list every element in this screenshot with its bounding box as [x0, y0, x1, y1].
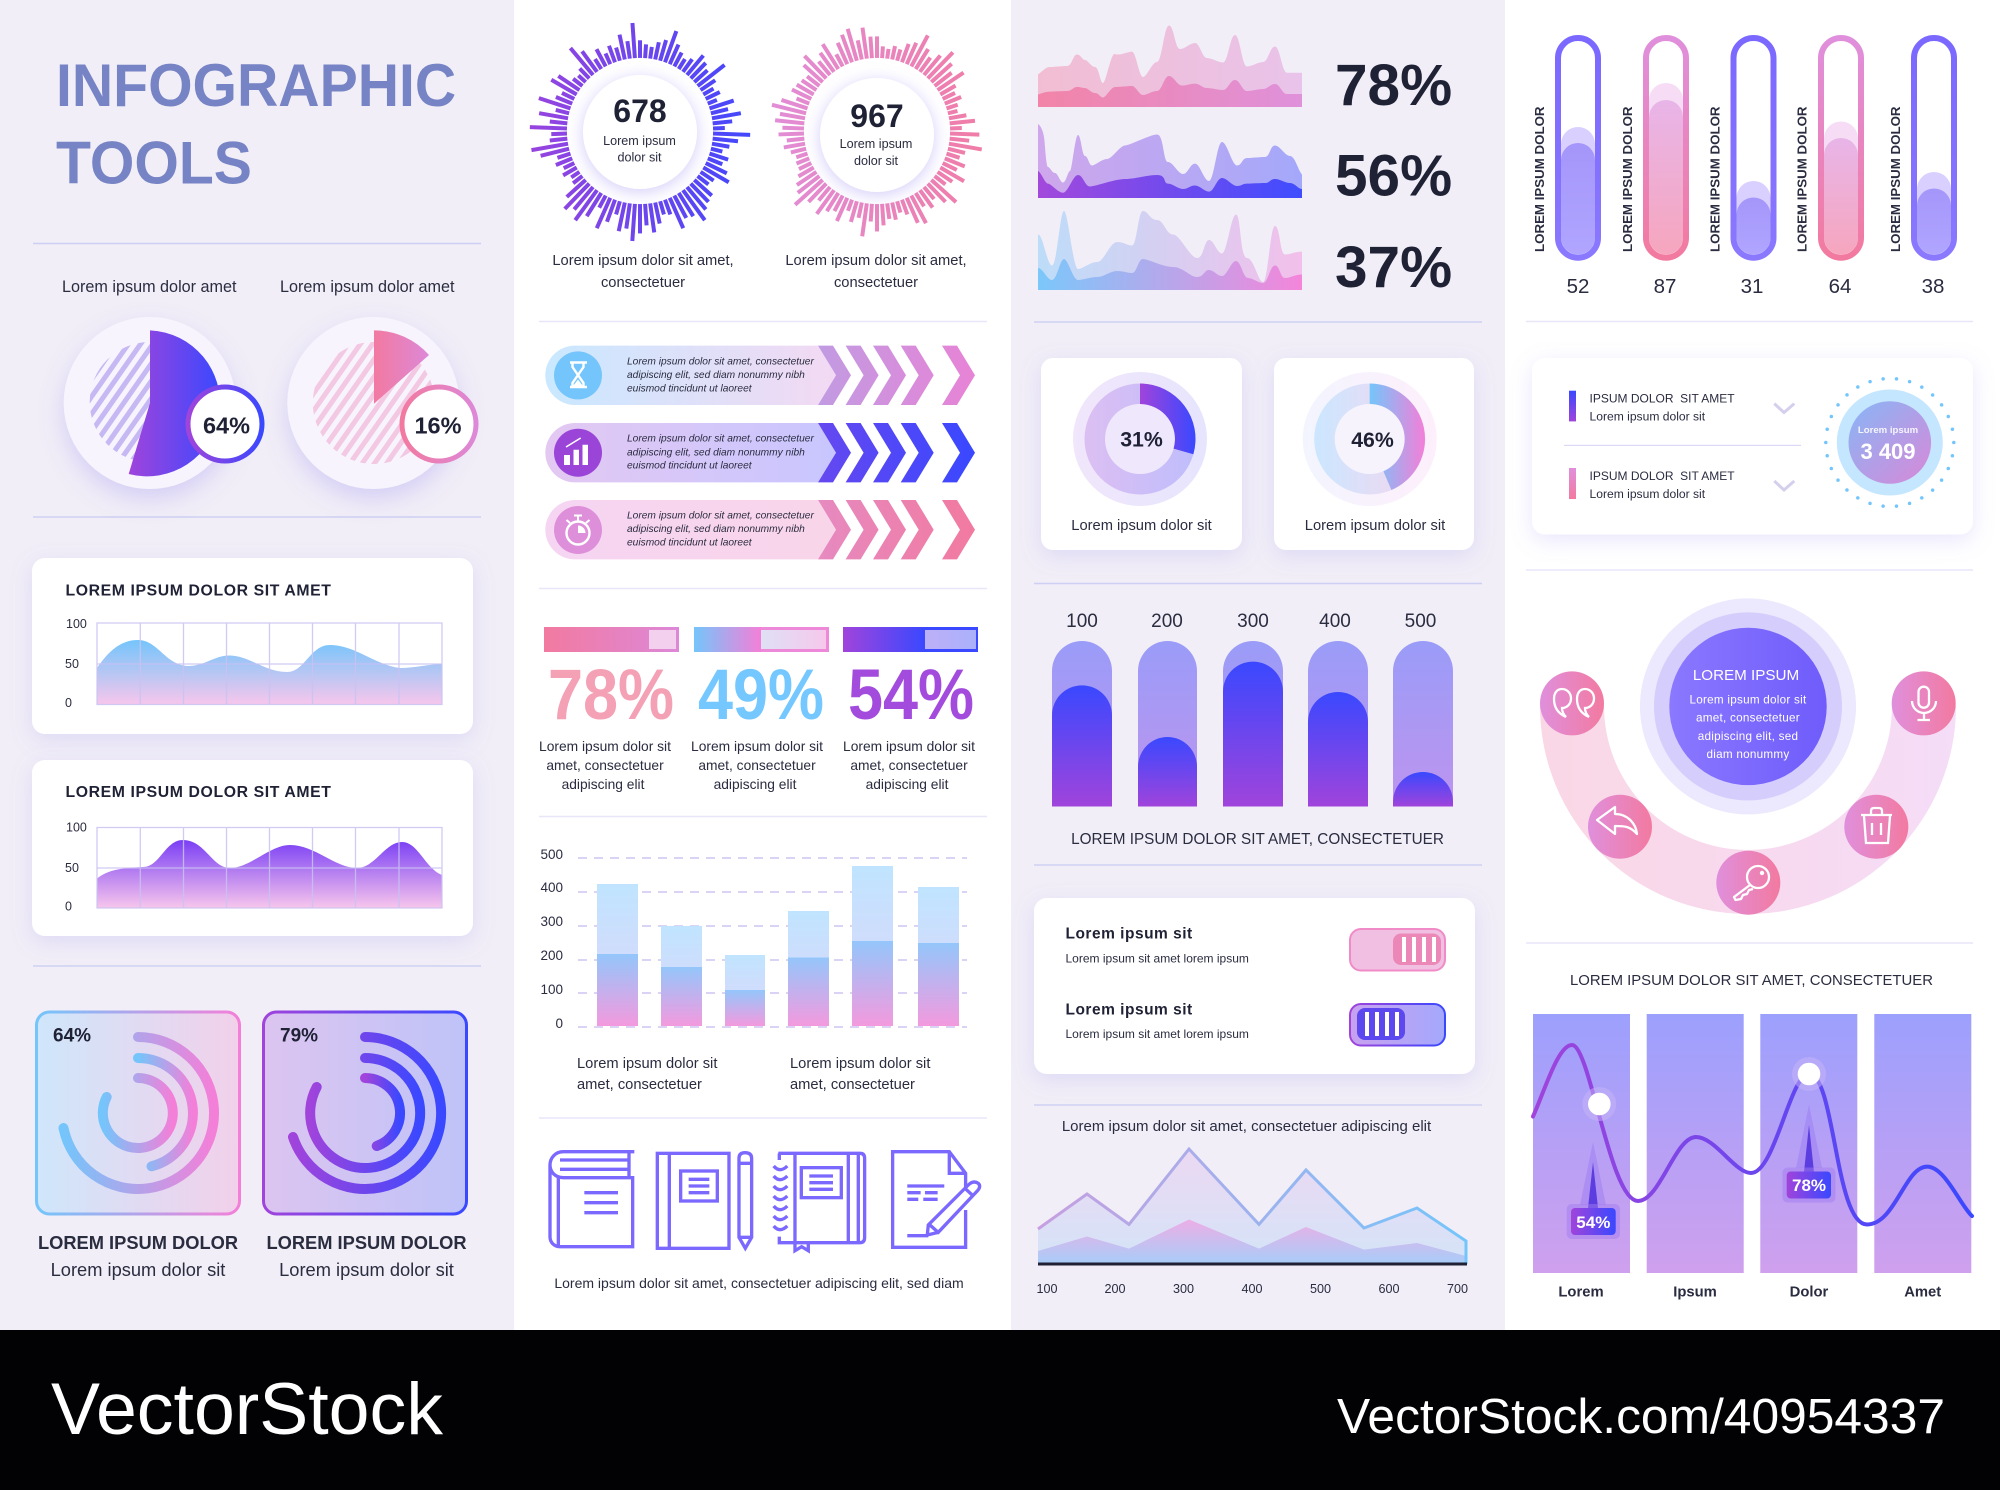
stat: 49%: amet, consectetuer — [698, 758, 816, 773]
capsule bar chart: LOREM IPSUM DOLOR SIT AMET, CONSECTETUER — [1071, 831, 1444, 848]
polygon area chart: 600 — [1378, 1282, 1400, 1296]
polygon area chart: 500 — [1310, 1282, 1331, 1296]
icon: reply — [1588, 795, 1652, 859]
capsule bar chart: 500 — [1405, 611, 1436, 632]
panel: line chart card 2 — [32, 760, 473, 936]
callout 78%: 78% — [1792, 1176, 1826, 1195]
gauge 87: 87 — [1654, 275, 1676, 298]
area chart 78% — [1038, 26, 1452, 118]
radial bar gauge 967: Lorem ipsum — [840, 137, 912, 151]
toggle: violet — [1350, 1004, 1445, 1046]
radial bar gauge 678: Lorem ipsum — [603, 134, 676, 148]
icon: hourglass — [554, 351, 602, 399]
card: toggles — [1034, 898, 1475, 1074]
column chart with curve: LOREM IPSUM DOLOR SIT AMET, CONSECTETUER — [1570, 973, 1933, 989]
gauge 52 — [1532, 38, 1598, 298]
panel: radial arc card 64%: Lorem ipsum dolor sit — [51, 1259, 225, 1280]
center circle: Lorem ipsum dolor sit — [1690, 693, 1807, 706]
polygon area chart — [1036, 1118, 1468, 1296]
arrow row 3: stopwatch: adipiscing elit, sed diam nonummy nibh — [627, 524, 805, 535]
stat: 54%: 54% — [848, 655, 974, 735]
arc band — [1540, 706, 1956, 914]
counter circle — [1826, 378, 1954, 506]
trend curve — [1533, 1045, 1972, 1224]
stat: 78%: adipiscing elit — [562, 777, 645, 792]
icon: trash — [1844, 795, 1908, 859]
stacked bar chart: 500 — [540, 847, 563, 862]
stacked bar chart — [540, 847, 967, 1093]
stat: 54%: amet, consectetuer — [850, 758, 968, 773]
radial bar gauge 967: consectetuer — [834, 275, 918, 291]
card: donut 46%: 46% — [1351, 428, 1394, 452]
gauge 38: LOREM IPSUM DOLOR — [1888, 106, 1903, 252]
icon row: books and notes — [550, 1152, 980, 1291]
gauge 38 — [1888, 38, 1954, 298]
stat: 54%: adipiscing elit — [866, 777, 949, 792]
panel: radial arc card 79%: 79% — [280, 1026, 318, 1046]
arrow row 1: hourglass: Lorem ipsum dolor sit amet, consectetuer — [627, 357, 814, 368]
capsule bar chart — [1052, 611, 1453, 848]
arrow row 1: hourglass — [545, 346, 975, 405]
stacked bar chart: 300 — [540, 914, 563, 929]
gauge 52: LOREM IPSUM DOLOR — [1532, 106, 1547, 252]
toggle: pink — [1350, 929, 1445, 970]
panel: pie charts — [62, 278, 476, 489]
arrow row 3: stopwatch — [545, 500, 975, 559]
radial bar gauge 678: 678 — [613, 93, 667, 129]
panel: line chart card 1: 0 — [65, 696, 72, 710]
arrow row 2: bar chart — [545, 423, 975, 482]
icon: quote — [1540, 671, 1604, 735]
radial menu — [1540, 598, 1956, 915]
card: list and counter: IPSUM DOLOR SIT AMET — [1590, 392, 1735, 406]
footer bar: VectorStock — [51, 1369, 443, 1450]
capsule bar chart: 100 — [1066, 611, 1098, 632]
card: toggles: Lorem ipsum sit amet lorem ipsum — [1066, 952, 1249, 966]
card: toggles: Lorem ipsum sit amet lorem ipsum — [1066, 1027, 1249, 1041]
icon: spiral notebook — [774, 1153, 865, 1251]
center circle: adipiscing elit, sed — [1698, 730, 1798, 743]
icon: pencil — [739, 1153, 752, 1248]
icon: stopwatch — [554, 506, 602, 554]
column chart with curve — [1533, 973, 1972, 1301]
card: toggles: Lorem ipsum sit — [1066, 1002, 1193, 1018]
radial bar gauge 678: dolor sit — [617, 150, 662, 164]
gauge 64: 64 — [1829, 275, 1851, 298]
panel: radial arc card 79%: LOREM IPSUM DOLOR — [266, 1232, 467, 1253]
stacked bar chart: 100 — [540, 982, 563, 997]
card: list and counter: Lorem ipsum dolor sit — [1590, 487, 1706, 501]
card: list and counter — [1532, 358, 1973, 534]
gauge 31: LOREM IPSUM DOLOR — [1708, 106, 1722, 252]
pie chart 64% — [64, 317, 262, 489]
gauge 87 — [1620, 38, 1686, 298]
capsule bar chart: 400 — [1319, 611, 1351, 632]
stat: 54%: Lorem ipsum dolor sit — [843, 739, 975, 754]
area chart 78%: 78% — [1335, 53, 1452, 118]
panel: line chart card 1 — [32, 558, 473, 734]
title: INFOGRAPHIC — [56, 53, 456, 119]
area chart 37% — [1038, 211, 1452, 300]
stat: 78%: Lorem ipsum dolor sit — [539, 739, 671, 754]
radial bar gauge 967: dolor sit — [854, 154, 899, 168]
gauge 38: 38 — [1922, 275, 1944, 298]
panel: radial arc card 79%: Lorem ipsum dolor sit — [279, 1259, 454, 1280]
panel: radial arc card 64%: LOREM IPSUM DOLOR — [38, 1232, 238, 1253]
pie chart 16%: 16% — [414, 412, 462, 438]
polygon area chart: 700 — [1447, 1282, 1468, 1296]
title: TOOLS — [56, 130, 252, 197]
capsule bar chart: 200 — [1151, 611, 1183, 632]
icon: document with pen — [893, 1152, 980, 1247]
icon: growth bars — [554, 429, 602, 477]
callout 54% — [1567, 1087, 1620, 1239]
column chart with curve: Ipsum — [1673, 1285, 1717, 1301]
icon row: books and notes: Lorem ipsum dolor sit amet, consectetuer adipiscing elit, sed diam — [554, 1275, 964, 1291]
panel: line chart card 2: 100 — [66, 820, 87, 834]
gauge 52: 52 — [1567, 275, 1589, 298]
counter circle: 3 409 — [1860, 439, 1916, 464]
column chart with curve: Lorem — [1558, 1285, 1604, 1301]
stacked bar chart: Lorem ipsum dolor sit — [790, 1056, 930, 1072]
stacked bar chart: 200 — [540, 948, 563, 963]
callout 54%: 54% — [1576, 1213, 1610, 1232]
gauge 31 — [1708, 38, 1774, 298]
gauge 87: LOREM IPSUM DOLOR — [1620, 106, 1635, 252]
card: list and counter: Lorem ipsum dolor sit — [1590, 410, 1706, 424]
panel: line chart card 1: LOREM IPSUM DOLOR SIT AMET — [66, 582, 332, 600]
gauge 31: 31 — [1741, 275, 1763, 298]
icon: notebook — [657, 1153, 729, 1248]
stat: 78% — [539, 627, 679, 792]
stacked bar chart: amet, consectetuer — [577, 1077, 702, 1093]
radial bar gauge 678: consectetuer — [601, 275, 685, 291]
card: donut 31%: 31% — [1120, 428, 1163, 452]
stat: 49%: Lorem ipsum dolor sit — [691, 739, 823, 754]
arrow row 3: stopwatch: Lorem ipsum dolor sit amet, consectetuer — [627, 511, 814, 522]
center circle — [1640, 598, 1856, 814]
center circle: LOREM IPSUM — [1693, 667, 1799, 684]
stat: 54% — [843, 627, 978, 792]
gauge 64: LOREM IPSUM DOLOR — [1794, 106, 1810, 252]
panel: line chart card 2: LOREM IPSUM DOLOR SIT AMET — [66, 784, 332, 801]
panel: radial arc card 64% — [36, 1012, 240, 1280]
icon: closed book — [550, 1152, 634, 1247]
panel: line chart card 1: 50 — [65, 657, 79, 671]
stacked bar chart: Lorem ipsum dolor sit — [577, 1056, 717, 1072]
icon: microphone — [1892, 671, 1956, 735]
polygon area chart: 300 — [1173, 1282, 1194, 1296]
footer bar: VectorStock.com/40954337 — [1337, 1389, 1945, 1444]
arrow row 1: hourglass: adipiscing elit, sed diam nonummy nibh — [627, 370, 805, 381]
panel: line chart card 1: 100 — [66, 617, 87, 631]
panel: radial arc card 64%: 64% — [53, 1026, 91, 1046]
label: left pie: Lorem ipsum dolor amet — [62, 278, 237, 296]
area chart 56% — [1038, 124, 1452, 208]
panel: line chart card 2: 50 — [65, 861, 79, 875]
arrow row 2: bar chart: euismod tincidunt ut laoreet — [627, 461, 753, 472]
card: donut 46%: Lorem ipsum dolor sit — [1305, 518, 1445, 534]
callout 78% — [1782, 1057, 1836, 1202]
radial bar gauge 967 — [772, 27, 982, 287]
arrow row 3: stopwatch: euismod tincidunt ut laoreet — [627, 538, 753, 548]
thermometer gauges — [1532, 38, 1954, 298]
radial bar gauge 967: Lorem ipsum dolor sit amet, — [785, 253, 967, 269]
stat: 78%: 78% — [548, 655, 674, 735]
card: donut 31% — [1041, 358, 1242, 550]
stat: 49% — [691, 627, 829, 792]
polygon area chart: Lorem ipsum dolor sit amet, consectetuer adipiscing elit — [1062, 1118, 1432, 1135]
area chart 56%: 56% — [1335, 144, 1452, 208]
capsule bar chart: 300 — [1237, 611, 1269, 632]
stacked bar chart: 400 — [540, 880, 563, 895]
arrow row 2: bar chart: adipiscing elit, sed diam nonummy nibh — [627, 447, 805, 458]
stacked bar chart: amet, consectetuer — [790, 1077, 915, 1093]
stat: 49%: 49% — [698, 655, 824, 735]
center circle: diam nonummy — [1707, 748, 1789, 761]
arrow row 1: hourglass: euismod tincidunt ut laoreet — [627, 384, 753, 394]
center circle: amet, consectetuer — [1696, 712, 1800, 725]
card: donut 31%: Lorem ipsum dolor sit — [1071, 518, 1212, 534]
column chart with curve: Amet — [1904, 1285, 1941, 1301]
stat: 78%: amet, consectetuer — [546, 758, 664, 773]
card: list and counter: IPSUM DOLOR SIT AMET — [1590, 469, 1735, 483]
stacked bar chart: 0 — [555, 1016, 563, 1031]
panel: radial arc card 79% — [264, 1012, 467, 1280]
arrow row 2: bar chart: Lorem ipsum dolor sit amet, consectetuer — [627, 434, 814, 445]
stat: 49%: adipiscing elit — [714, 777, 797, 792]
radial bar gauge 678 — [530, 22, 750, 287]
polygon area chart: 200 — [1104, 1282, 1126, 1296]
radial bar gauge 967: 967 — [850, 98, 904, 134]
radial bar gauge 678: Lorem ipsum dolor sit amet, — [552, 253, 734, 269]
polygon area chart: 100 — [1036, 1282, 1058, 1296]
card: donut 46% — [1274, 358, 1474, 550]
pie chart 16% — [287, 317, 476, 489]
area chart 37%: 37% — [1335, 235, 1452, 300]
column chart with curve: Dolor — [1790, 1285, 1829, 1301]
pie chart 64%: 64% — [203, 412, 250, 438]
icon: key — [1716, 851, 1780, 915]
polygon area chart: 400 — [1241, 1282, 1263, 1296]
title — [56, 53, 456, 197]
label: right pie: Lorem ipsum dolor amet — [280, 278, 455, 296]
counter circle: Lorem ipsum — [1858, 425, 1918, 436]
footer bar — [0, 1330, 2000, 1490]
card: toggles: Lorem ipsum sit — [1066, 926, 1193, 942]
gauge 64 — [1794, 38, 1861, 298]
panel: line chart card 2: 0 — [65, 900, 72, 914]
